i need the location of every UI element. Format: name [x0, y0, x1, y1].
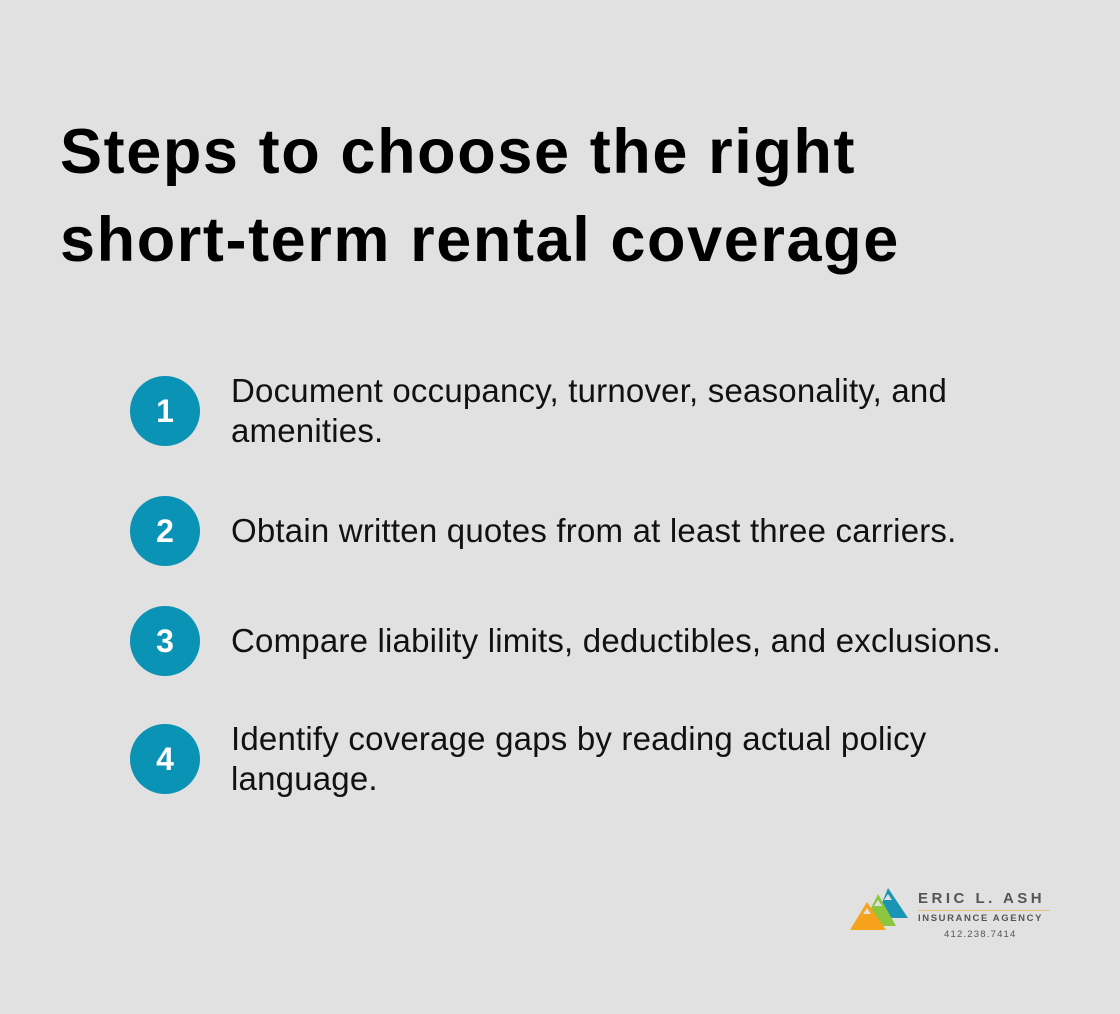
text 4: language. — [231, 760, 378, 797]
text 1: amenities. — [231, 412, 383, 449]
title: short-term rental coverage — [60, 205, 900, 275]
circle 4: 4 — [156, 741, 174, 777]
circle 4 — [130, 724, 200, 794]
logo: INSURANCE AGENCY — [918, 913, 1043, 924]
step 3 — [130, 606, 1001, 676]
circle 2 — [130, 496, 200, 566]
circle 1: 1 — [156, 393, 174, 429]
circle 3: 3 — [156, 623, 174, 659]
circle 2: 2 — [156, 513, 174, 549]
text 1: Document occupancy, turnover, seasonality, and — [231, 372, 947, 409]
title — [60, 117, 900, 275]
text 4 — [231, 720, 926, 797]
text 3: Compare liability limits, deductibles, and exclusions. — [231, 622, 1001, 659]
logo: 412.238.7414 — [944, 929, 1017, 940]
title: Steps to choose the right — [60, 117, 856, 187]
text 1 — [231, 372, 947, 449]
text 4: Identify coverage gaps by reading actual policy — [231, 720, 926, 757]
circle 1 — [130, 376, 200, 446]
text 2: Obtain written quotes from at least three carriers. — [231, 512, 957, 549]
logo text: ERIC L. ASH — [918, 890, 1045, 907]
circle 3 — [130, 606, 200, 676]
step 2 — [130, 496, 957, 566]
step 1 — [130, 372, 947, 449]
step 4 — [130, 720, 926, 797]
logo — [850, 888, 1050, 940]
icon: mountains — [850, 888, 908, 930]
